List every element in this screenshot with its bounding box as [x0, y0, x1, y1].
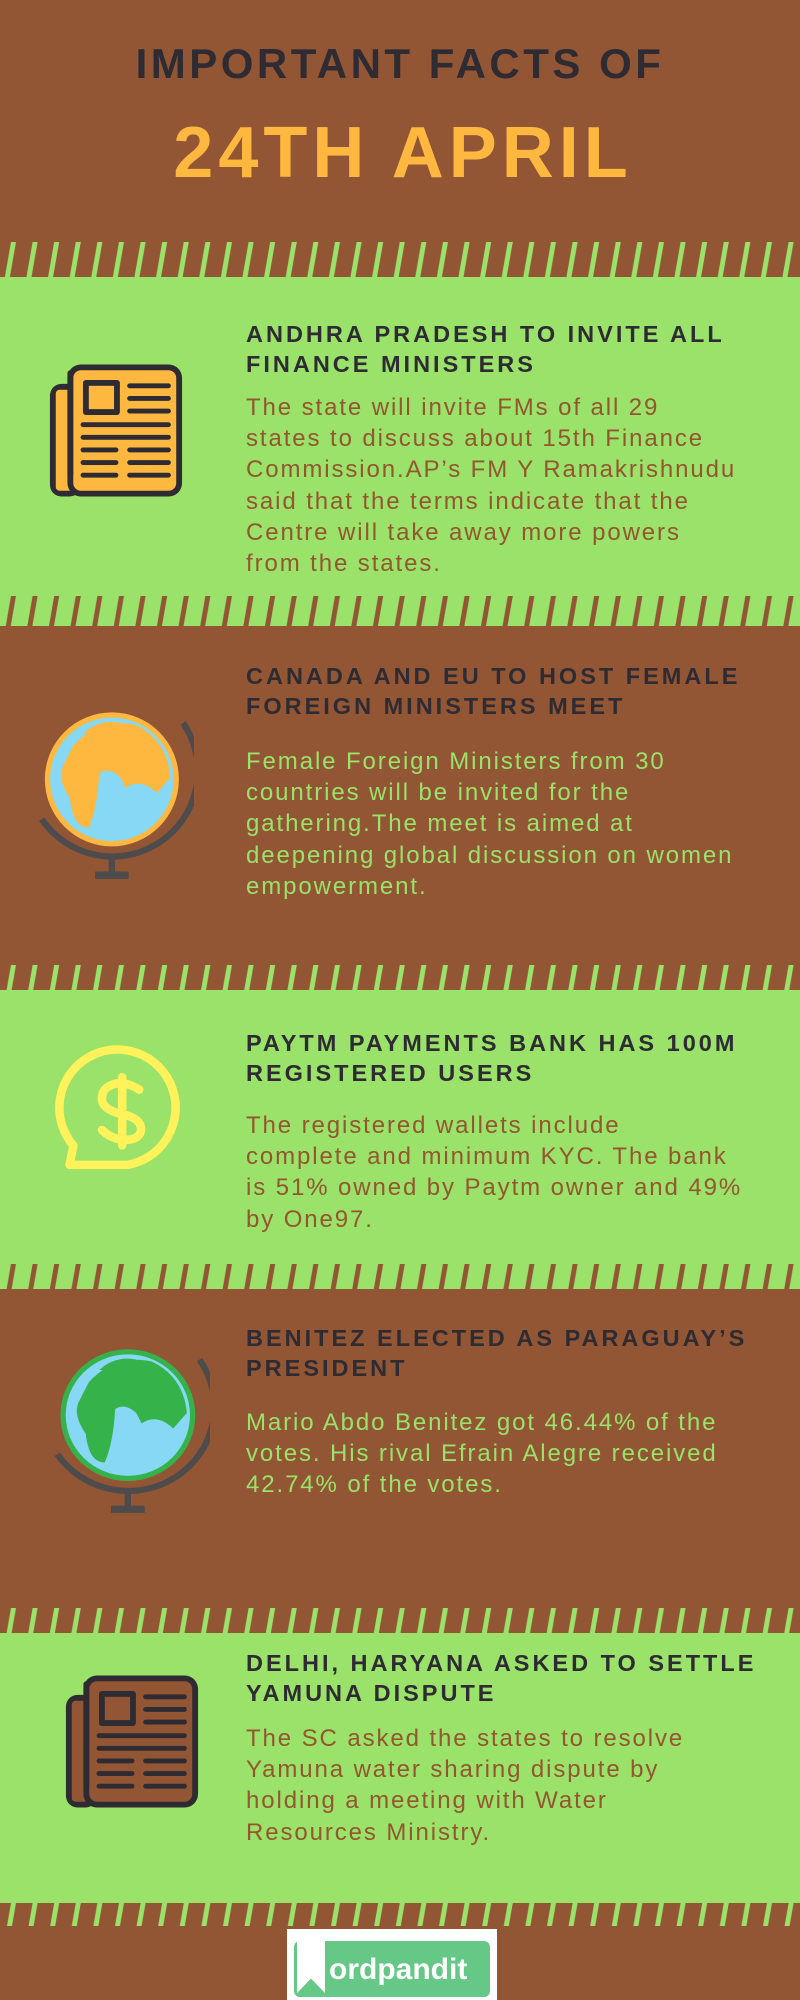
heading: PRESIDENT — [246, 1355, 408, 1381]
heading: YAMUNA DISPUTE — [246, 1680, 496, 1706]
body text: The registered wallets include — [246, 1112, 620, 1139]
heading — [246, 663, 740, 719]
panel: benitez — [0, 1289, 800, 1608]
body text — [246, 394, 736, 577]
heading: BENITEZ ELECTED AS PARAGUAY’S — [246, 1325, 747, 1351]
body text: Resources Ministry. — [246, 1819, 491, 1846]
body text: countries will be invited for the — [246, 779, 630, 806]
body text: Female Foreign Ministers from 30 — [246, 748, 666, 775]
panel: andhra pradesh — [0, 277, 800, 596]
body text: 42.74% of the votes. — [246, 1471, 503, 1498]
heading — [246, 1325, 747, 1381]
title line 1: IMPORTANT FACTS OF — [136, 40, 664, 87]
body text: empowerment. — [246, 873, 428, 900]
icon: newspaper brown — [66, 1676, 198, 1808]
body text — [246, 748, 733, 900]
heading: DELHI, HARYANA ASKED TO SETTLE — [246, 1650, 756, 1676]
heading: PAYTM PAYMENTS BANK HAS 100M — [246, 1030, 737, 1056]
heading — [246, 1030, 737, 1086]
body text: is 51% owned by Paytm owner and 49% — [246, 1174, 742, 1201]
body text — [246, 1409, 718, 1498]
heading — [246, 321, 725, 377]
icon: globe orange — [39, 712, 194, 879]
title date: 24TH APRIL — [173, 113, 633, 193]
heading: FINANCE MINISTERS — [246, 351, 536, 377]
body text: complete and minimum KYC. The bank — [246, 1143, 728, 1170]
body text — [246, 1725, 684, 1846]
footer — [0, 1926, 800, 2000]
body text: Centre will take away more powers — [246, 519, 681, 546]
icon: newspaper — [50, 364, 182, 496]
icon: dollar speech bubble — [55, 1045, 180, 1170]
body text — [246, 1112, 742, 1233]
body text: Mario Abdo Benitez got 46.44% of the — [246, 1409, 717, 1436]
panel: paytm — [0, 990, 800, 1264]
body text: The SC asked the states to resolve — [246, 1725, 684, 1752]
heading: ANDHRA PRADESH TO INVITE ALL — [246, 321, 725, 347]
body text: from the states. — [246, 550, 442, 577]
body text: The state will invite FMs of all 29 — [246, 394, 659, 421]
body text: gathering.The meet is aimed at — [246, 810, 634, 837]
body text: votes. His rival Efrain Alegre received — [246, 1440, 718, 1467]
icon: globe green — [54, 1349, 210, 1513]
body text: deepening global discussion on women — [246, 842, 733, 869]
heading — [246, 1650, 756, 1706]
panel: canada eu — [0, 626, 800, 965]
body text: states to discuss about 15th Finance — [246, 425, 704, 452]
body text: Yamuna water sharing dispute by — [246, 1756, 659, 1783]
header panel — [0, 0, 800, 277]
panel: yamuna — [0, 1633, 800, 1903]
logo: wordpandit — [287, 1929, 497, 2000]
body text: holding a meeting with Water — [246, 1787, 608, 1814]
heading: REGISTERED USERS — [246, 1060, 534, 1086]
logo: wordpandit: ordpandit — [329, 1953, 467, 1986]
heading: CANADA AND EU TO HOST FEMALE — [246, 663, 740, 689]
body text: Commission.AP’s FM Y Ramakrishnudu — [246, 456, 736, 483]
heading: FOREIGN MINISTERS MEET — [246, 693, 625, 719]
body text: said that the terms indicate that the — [246, 488, 690, 515]
body text: by One97. — [246, 1206, 374, 1233]
